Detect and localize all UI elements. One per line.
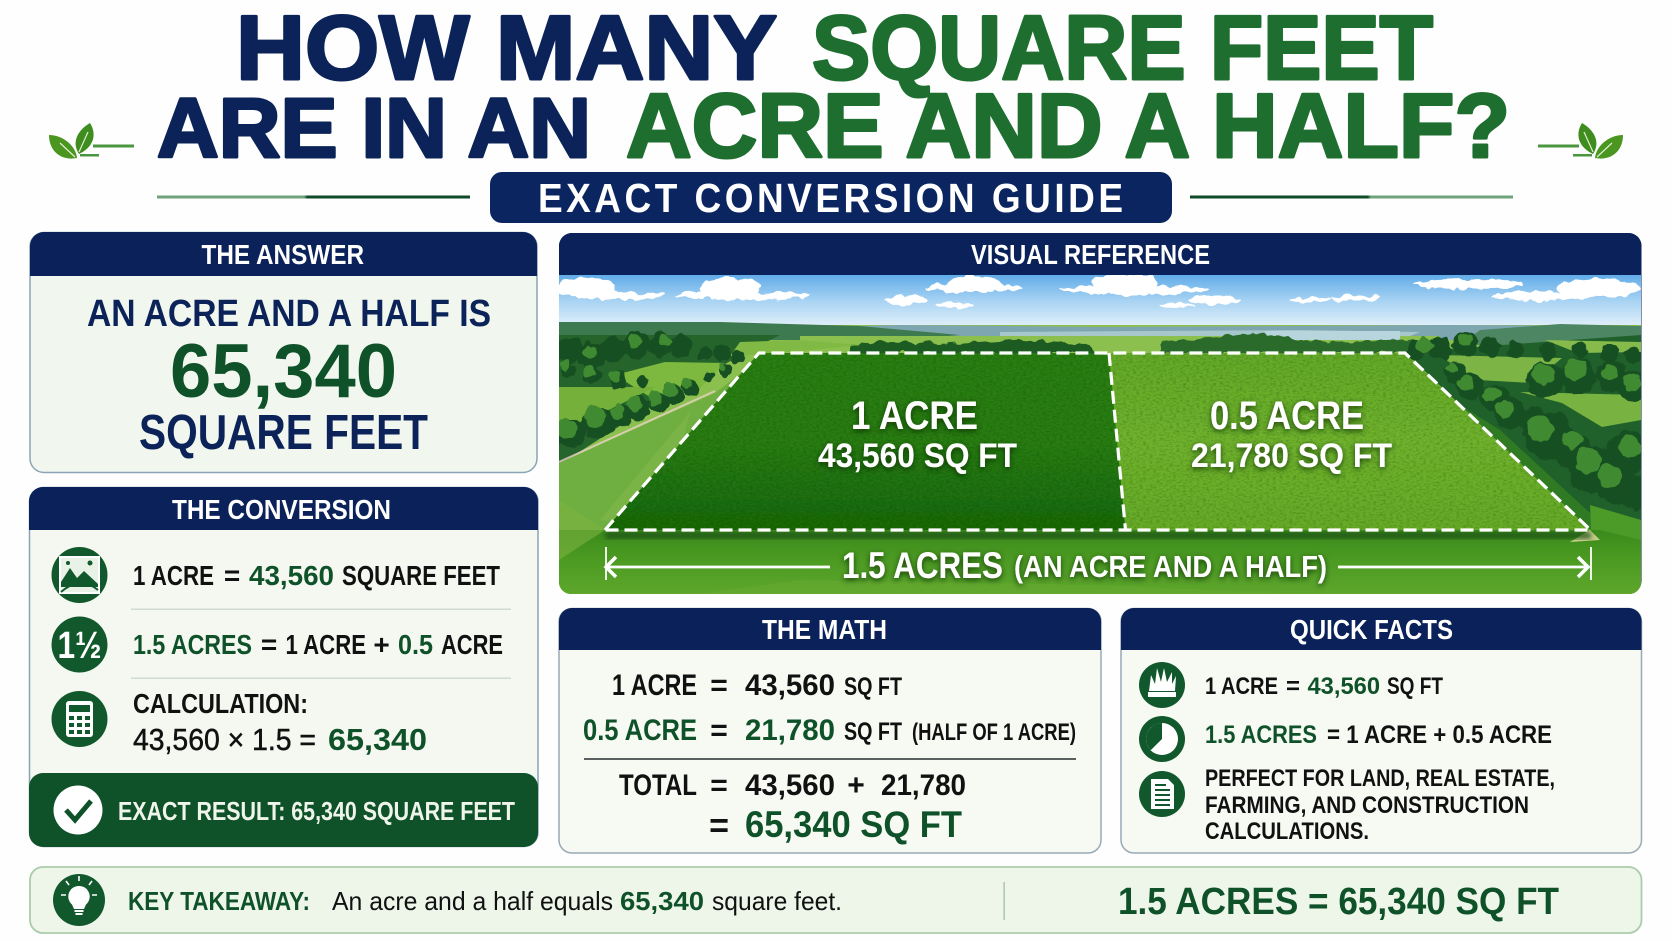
panel: the math [559,608,1101,853]
takeaway text: An acre and a half equals [332,886,613,916]
field labels: 1 ACRE [851,394,978,438]
panel: the answer [30,232,537,472]
conversion header [29,487,538,530]
tree clusters [555,331,1654,510]
conversion row 1: SQUARE FEET [342,560,500,591]
subtitle rule left [157,196,470,198]
fact 1: = [1286,673,1300,700]
math header: THE MATH [762,614,887,645]
visual header: VISUAL REFERENCE [971,239,1210,270]
landscape illustration [555,274,1654,594]
exact result bar [29,773,538,847]
conversion header: THE CONVERSION [172,494,391,525]
conversion row 2 [133,629,503,660]
panel: quick facts [1121,608,1642,853]
panel: visual reference [555,233,1654,594]
left lane [559,368,748,594]
takeaway text [128,886,842,916]
visual header [559,233,1642,276]
math total: 43,560 [745,769,835,802]
icon: grass plot [1139,662,1185,708]
subtitle rule right [1190,196,1513,198]
conversion row 1: 1 ACRE [133,560,214,591]
title: ARE IN AN [157,81,591,175]
field labels [818,394,1392,586]
fact 3: CALCULATIONS. [1205,818,1369,845]
width arrow [605,547,1591,580]
field: half acre [1109,353,1590,530]
conversion calculation: 65,340 [328,722,427,757]
answer unit: SQUARE FEET [139,406,428,460]
icon: right leaves [1538,123,1623,159]
quick facts header: QUICK FACTS [1290,614,1453,645]
conversion row 2: 0.5 [398,629,433,660]
math row 1 [612,669,902,702]
fact 1: 43,560 [1308,673,1380,700]
math row 2: 21,780 [745,714,835,747]
quick facts header [1121,608,1642,650]
fact 1 [1205,673,1443,700]
math row 2: (HALF OF 1 ACRE) [912,719,1076,746]
field labels: (AN ACRE AND A HALF) [1014,549,1327,584]
conversion row 2: = [261,629,277,660]
conversion calculation: 43,560 × 1.5 = [133,722,316,757]
math total [619,769,966,845]
takeaway text: KEY TAKEAWAY: [128,886,310,916]
math total: = [709,807,729,845]
field labels: 0.5 ACRE [1210,394,1364,438]
title: SQUARE FEET [812,0,1433,99]
panel: key takeaway [30,867,1642,933]
math row 1: 43,560 [745,669,835,702]
math row 1: 1 ACRE [612,669,697,702]
field: one acre [605,353,1126,530]
field shadow strip [605,532,1591,539]
math row 2 [583,714,1076,747]
math row 2: SQ FT [844,718,902,746]
field dashed outline [605,353,1590,530]
takeaway text: 65,340 [620,886,704,916]
answer header [30,232,537,276]
horizon land [559,325,1642,594]
icon: light bulb [53,874,105,926]
fact 1: SQ FT [1387,673,1443,700]
conversion row 2: ACRE [441,629,503,660]
icon: land picture [52,547,108,603]
fact 2: = 1 ACRE + 0.5 ACRE [1327,721,1552,749]
icon: left leaves [49,123,134,159]
icon: clock [1139,716,1185,762]
field labels: 43,560 SQ FT [818,437,1017,475]
conversion row 2: + [373,629,390,660]
fact 3: FARMING, AND CONSTRUCTION [1205,792,1529,819]
distant tree rows [850,333,1420,353]
fact 1: 1 ACRE [1205,673,1278,700]
answer lead-in: AN ACRE AND A HALF IS [87,293,491,335]
math total: 65,340 SQ FT [745,804,962,845]
title: ACRE AND A HALF? [626,76,1510,177]
conversion row 1: 43,560 [249,560,334,591]
panel: the conversion [29,487,538,847]
conversion row 1: = [224,560,240,591]
right lane [1460,405,1641,594]
subtitle pill: EXACT CONVERSION GUIDE [538,176,1123,221]
fact 3 [1205,765,1555,845]
fact 2: 1.5 ACRES [1205,721,1317,749]
math row 1: SQ FT [844,673,902,701]
math row 2: 0.5 ACRE [583,714,697,747]
math total: + [847,769,865,802]
icon: one and a half: 1½ [58,625,102,667]
icon: document [1139,771,1185,817]
right meadows [1405,335,1641,530]
icon: one and a half [52,616,108,672]
fact 2 [1205,721,1552,749]
math total: TOTAL [619,769,697,802]
math row 1: = [710,669,728,702]
field labels: 21,780 SQ FT [1191,437,1392,475]
conversion calculation: CALCULATION: [133,688,308,719]
icon: calculator [52,691,108,747]
conversion calculation [133,688,427,757]
conversion row 2: 1.5 ACRES [133,629,252,660]
takeaway text: square feet. [712,886,842,916]
math total: = [710,769,728,802]
field labels: 1.5 ACRES [842,545,1003,586]
answer number: 65,340 [170,329,397,414]
conversion row 2: 1 ACRE [286,629,366,660]
left meadows [559,335,780,465]
math total: 21,780 [881,769,966,802]
math row 2: = [710,714,728,747]
answer header: THE ANSWER [202,239,364,270]
exact result bar: EXACT RESULT: 65,340 SQUARE FEET [118,796,515,826]
takeaway formula: 1.5 ACRES = 65,340 SQ FT [1118,881,1559,923]
foreground grass [559,530,1641,594]
math header [559,608,1101,650]
title [157,0,1510,177]
title: HOW MANY [236,0,777,99]
fact 3: PERFECT FOR LAND, REAL ESTATE, [1205,765,1555,792]
conversion row 1 [133,560,500,591]
